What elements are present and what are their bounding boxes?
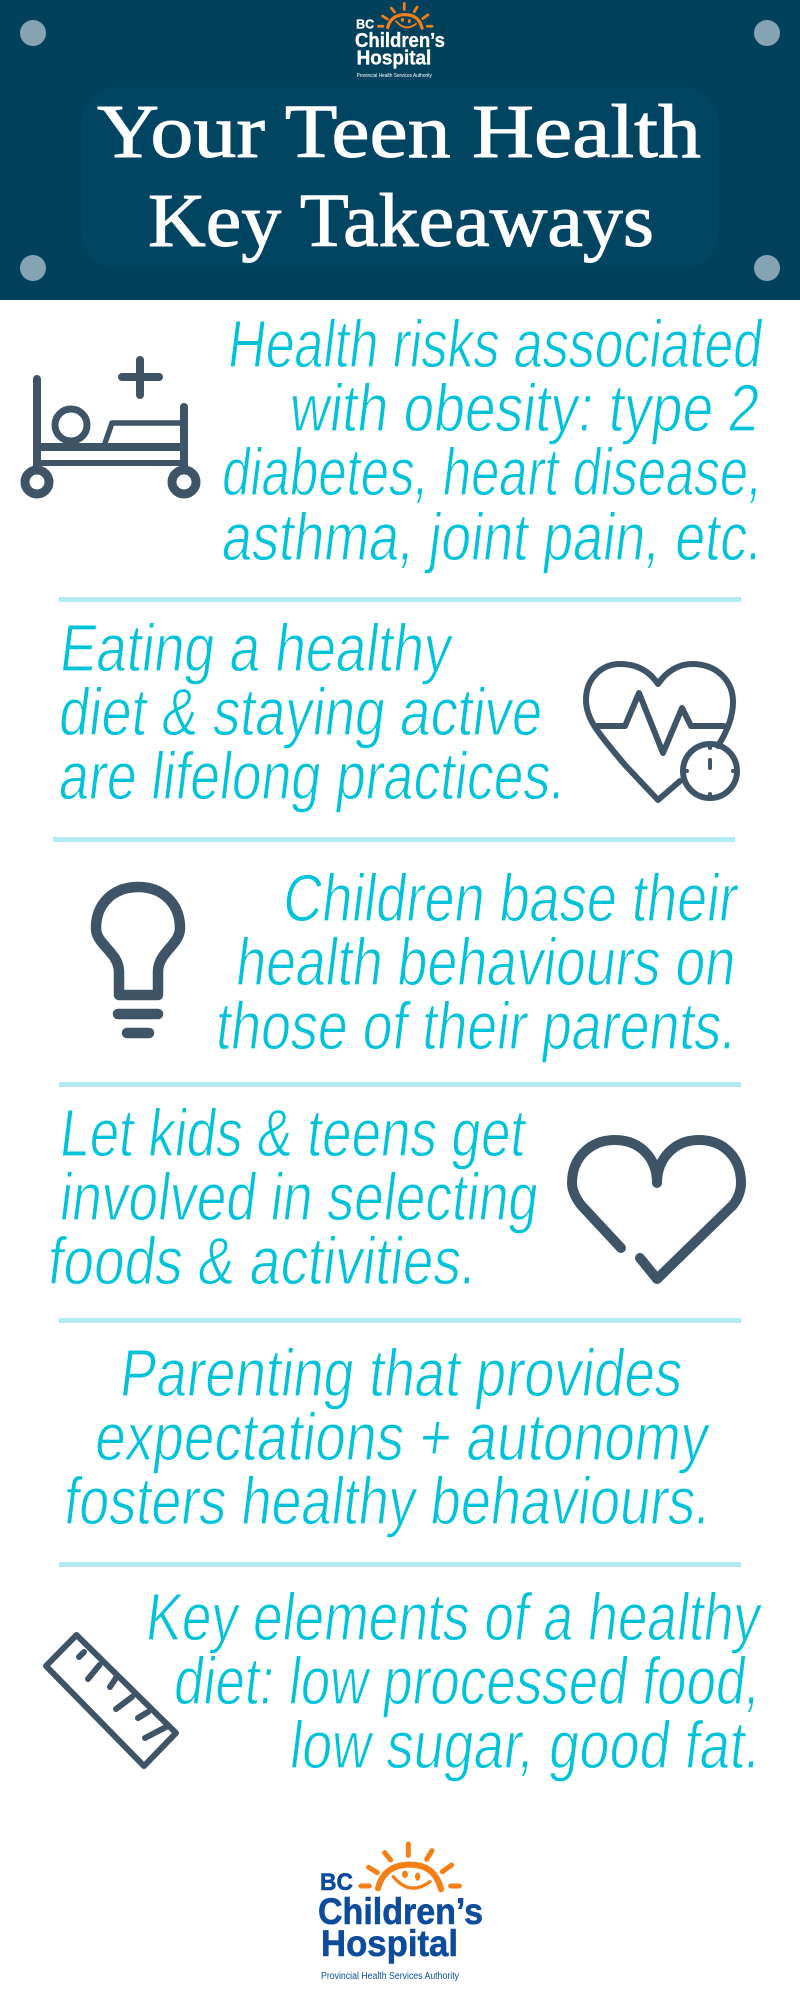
icon: light bulb — [96, 887, 180, 1033]
icon: heart with pulse and stopwatch — [586, 664, 737, 800]
panel: lifelong practices — [55, 611, 737, 814]
logo: header: Children’s — [355, 30, 445, 52]
text: health risks — [218, 307, 767, 575]
header banner — [0, 0, 800, 300]
logo: header: Hospital — [357, 47, 431, 69]
text: involve kids: foods & activities. — [44, 1224, 481, 1299]
logo: footer — [318, 1844, 483, 1982]
icon: ruler — [46, 1635, 176, 1766]
text: lifelong practices: diet & staying active — [55, 675, 547, 750]
text: involve kids: Let kids & teens get — [56, 1096, 531, 1171]
title: Key Takeaways — [148, 179, 654, 263]
panel: healthy diet — [46, 1580, 766, 1783]
text: lifelong practices — [55, 611, 570, 814]
panel: involve kids — [44, 1096, 741, 1299]
title panel — [81, 87, 719, 268]
text: parenting — [60, 1336, 715, 1539]
logo: footer: Children’s — [318, 1891, 483, 1932]
title — [97, 90, 701, 263]
corner rivets — [20, 20, 780, 281]
logo: header — [355, 3, 445, 79]
icon: hospital bed — [25, 360, 196, 494]
text: parents as models — [212, 861, 742, 1064]
logo: footer: Provincial Health Services Authority — [321, 1971, 459, 1982]
logo: header: BC — [356, 16, 375, 31]
panel: health risks — [25, 307, 767, 575]
text: parenting: Parenting that provides — [116, 1336, 687, 1411]
logo: header: Provincial Health Services Authority — [357, 73, 432, 79]
logo: footer: BC — [320, 1869, 353, 1896]
text: lifelong practices: are lifelong practices. — [55, 739, 570, 814]
title: Your Teen Health — [97, 90, 701, 174]
icon: heart with check — [572, 1140, 741, 1279]
text: involve kids — [44, 1096, 543, 1299]
text: involve kids: involved in selecting — [56, 1160, 543, 1235]
panel: parents as models — [96, 861, 742, 1064]
text: lifelong practices: Eating a healthy — [56, 611, 457, 686]
text: healthy diet — [142, 1580, 766, 1783]
logo: footer: Hospital — [321, 1923, 458, 1964]
